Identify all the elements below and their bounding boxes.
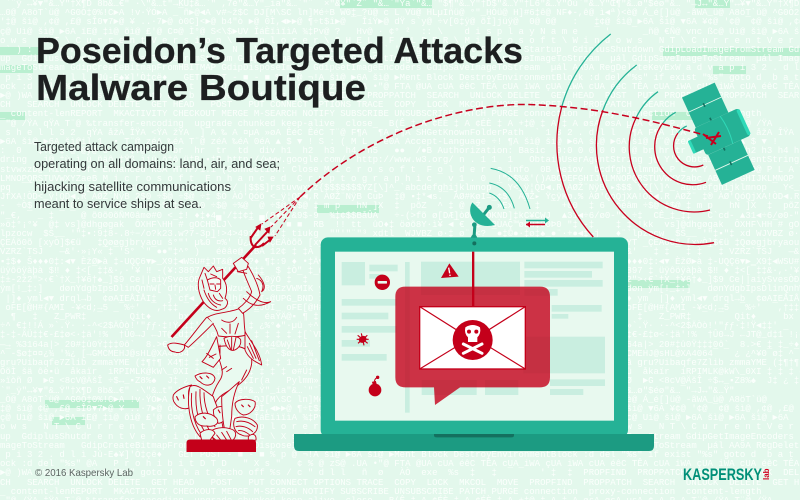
right arm raised [238, 267, 260, 313]
icon: no entry [375, 275, 390, 290]
torso [207, 307, 246, 337]
speech bubble [395, 287, 550, 405]
skirt fins [202, 337, 221, 367]
waves [195, 373, 215, 385]
dashed trajectory line [300, 104, 708, 197]
title: Malware Boutique [36, 67, 366, 108]
icon: satellite [670, 78, 765, 190]
envelope [420, 307, 525, 369]
transfer arrows [526, 218, 549, 228]
copyright: © 2016 Kaspersky Lab [35, 467, 133, 479]
laptop notch [434, 434, 514, 437]
antenna cable [472, 252, 474, 307]
laptop screen [335, 252, 614, 421]
description text: Targeted attack campaign [34, 140, 174, 154]
laptop [294, 237, 654, 451]
hair and crown [198, 266, 227, 310]
title: Poseidon’s Targeted Attacks [36, 30, 523, 71]
laptop lid [321, 237, 628, 437]
trident [172, 224, 273, 337]
icon: bomb [369, 376, 381, 396]
tail and body [211, 346, 252, 417]
icon: satellite dish [470, 168, 530, 245]
icon: target mark on satellite [703, 132, 721, 145]
left arm and hand [168, 317, 213, 353]
muscle lines [220, 272, 247, 380]
icon: skull and crossbones [453, 320, 493, 360]
logo: Kaspersky Lab: lab [762, 468, 771, 480]
laptop base [294, 434, 654, 451]
description text: meant to service ships at sea. [34, 197, 202, 211]
dashed trident rays [262, 197, 300, 236]
description text [34, 140, 280, 211]
description text: operating on all domains: land, air, and sea; [34, 157, 280, 171]
title [36, 30, 523, 108]
icon: bug [357, 333, 369, 345]
shell [224, 336, 241, 350]
logo: Kaspersky Lab: KASPERSKY [683, 466, 762, 484]
fin behind arm [243, 275, 271, 305]
Poseidon figure [168, 257, 271, 444]
description text: hijacking satellite communications [34, 180, 231, 194]
icon: warning triangle [441, 263, 459, 278]
signal arcs around satellite [557, 34, 714, 244]
screen content blocks [342, 262, 605, 413]
statue base [186, 440, 256, 452]
